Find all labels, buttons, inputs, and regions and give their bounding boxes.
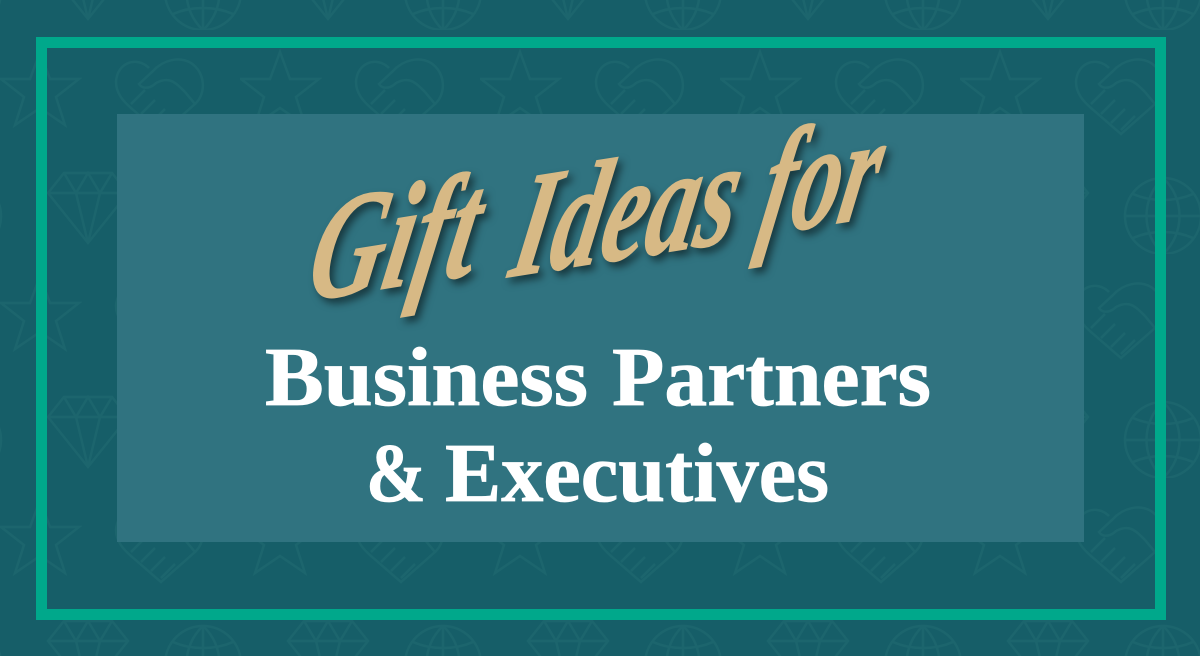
subtitle line 1	[265, 331, 931, 424]
script heading: Gift Ideas for: Ideas	[499, 108, 756, 311]
subtitle line 2: Executives	[445, 427, 829, 520]
subtitle line 1: Business	[265, 331, 588, 424]
script heading: Gift Ideas for: Gift	[298, 141, 499, 334]
script heading: Gift Ideas for	[298, 84, 899, 334]
subtitle line 1: Partners	[612, 331, 931, 424]
subtitle line 2: &	[366, 427, 426, 520]
central panel	[117, 114, 1084, 542]
script heading: Gift Ideas for: for	[749, 84, 899, 269]
